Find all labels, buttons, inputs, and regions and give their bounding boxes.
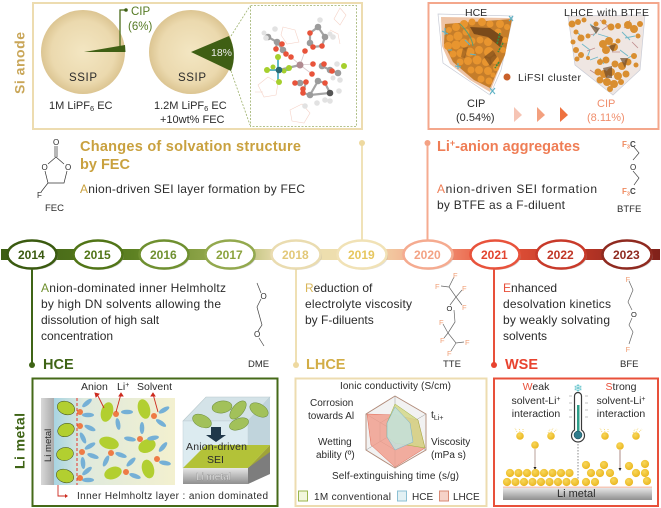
structure: BFE: F (626, 345, 630, 354)
icon: thermometer (569, 392, 588, 442)
year 2023 (602, 240, 653, 270)
heading: Li+-anion aggregates: -anion aggregates (455, 139, 580, 155)
heading: WSE: WSE (505, 357, 538, 373)
diagram: anion-driven SEI cube: Anion-driven (186, 441, 247, 453)
label: strong solvent-Li+ interaction: Strong (606, 381, 637, 393)
year 2018 (272, 240, 322, 270)
section label: Si anode: Si anode (12, 32, 28, 94)
heading: changes of solvation structure (80, 139, 301, 173)
panel: HCE Li metal (32, 378, 278, 506)
structure: TTE: F (447, 349, 452, 358)
diagram: inner Helmholtz layer: Li metal (43, 429, 54, 462)
year 2022: 2022 (547, 248, 574, 262)
label: strong solvent-Li+ interaction: interaction (597, 408, 645, 420)
molecule inset (250, 6, 356, 126)
pie chart: 1M LiPF6 EC: SSIP (69, 72, 97, 84)
heading: HCE: HCE (43, 357, 74, 373)
text: WSE description: Enhanced (503, 281, 557, 295)
year 2019 (338, 240, 388, 270)
structure: DME: O (260, 292, 267, 301)
panel: Si anode solvation (33, 3, 362, 129)
radar axis labels: Corrosion (310, 398, 353, 409)
radar axis labels: Li+ (434, 415, 443, 422)
structure: TTE: F (465, 338, 470, 347)
year 2017 (206, 240, 256, 270)
radar axis labels: Self-extinguishing time (s/g) (332, 471, 459, 482)
text: HCE description: dissolution of high salt (41, 313, 160, 327)
radar axis labels: Ionic conductivity (S/cm) (340, 381, 451, 392)
structure: BFE: O (631, 310, 637, 319)
structure: BFE: F (626, 275, 630, 284)
radar axis labels: ability (º) (316, 450, 355, 461)
pie chart: 1.2M LiPF6 EC + FEC: 6 (204, 104, 208, 113)
pie chart: 1M LiPF6 EC: 6 (90, 104, 94, 113)
radar legend: HCE (412, 492, 433, 503)
label: weak solvent-Li+ interaction: Weak (523, 381, 550, 393)
radar axis labels: towards Al (308, 411, 354, 422)
pie chart: 1.2M LiPF6 EC + FEC: 1.2M LiPF (154, 100, 204, 112)
year 2015: 2015 (84, 248, 111, 262)
Li metal bar: Li metal (557, 488, 596, 500)
structure: FEC (37, 138, 71, 214)
radar axis labels: (mPa s) (431, 450, 466, 461)
Li metal bar (503, 486, 652, 500)
callout: inner Helmholtz layer: Inner Helmholtz layer : anion dominated (77, 491, 268, 502)
structure: BTFE: BTFE (617, 204, 641, 215)
label: CIP 0.54%: (0.54%) (456, 112, 495, 124)
radar legend: 1M conventional (314, 492, 391, 503)
radar legend: LHCE (453, 492, 480, 503)
text: FEC anion-driven SEI: Anion-driven SEI layer formation by FEC (80, 182, 305, 196)
text: WSE description: by weakly solvating (503, 313, 610, 327)
diagram: anion-driven SEI cube: SEI (207, 454, 224, 466)
text: HCE description: Anion-dominated inner Helmholtz (41, 281, 226, 295)
label: weak solvent-Li+ interaction: interaction (512, 408, 560, 420)
label: CIP 8.11%: CIP (597, 98, 615, 110)
pie chart: 1M LiPF6 EC: CIP (131, 6, 150, 18)
structure: BFE (620, 275, 638, 370)
text: LHCE description: by F-diluents (305, 313, 374, 327)
label: strong solvent-Li+ interaction: + (641, 396, 646, 403)
heading: Li+-anion aggregates: + (450, 138, 455, 148)
icon: snowflake: ❄ (573, 382, 583, 395)
year 2014 (8, 240, 58, 270)
labels: anion, Li+, solvent: Anion (81, 381, 108, 393)
pie chart: 1.2M LiPF6 EC + FEC: EC (208, 100, 227, 112)
arrows (514, 107, 568, 122)
structure: TTE: O (446, 304, 452, 313)
structure: DME: DME (248, 359, 269, 370)
text: HCE description: by high DN solvents allowing the (41, 297, 221, 311)
labels: anion, Li+, solvent: Solvent (137, 381, 172, 393)
label: weak solvent-Li+ interaction: + (556, 396, 561, 403)
structure: FEC: O (65, 163, 71, 172)
year 2014: 2014 (18, 248, 45, 262)
pie chart: 1M LiPF6 EC: 1M LiPF (49, 100, 90, 112)
text: BTFE anion-driven SEI (437, 182, 597, 212)
section label: Li metal: Li metal (12, 413, 28, 469)
year 2022 (536, 240, 587, 270)
year 2019: 2019 (348, 248, 375, 262)
radar legend (298, 491, 480, 503)
heading: LHCE: LHCE (306, 357, 346, 373)
structure: DME (248, 283, 269, 370)
structure: FEC: O (53, 138, 59, 147)
structure: FEC: FEC (45, 203, 64, 214)
label: CIP 0.54%: CIP (467, 98, 485, 110)
diagram: anion-driven SEI cube: Li metal (196, 472, 231, 483)
text: HCE description: concentration (41, 329, 113, 343)
radar axis labels: t (431, 409, 434, 421)
pie chart: 1M LiPF6 EC: (6%) (128, 21, 152, 33)
label: CIP 8.11%: (8.11%) (587, 112, 625, 124)
connector lines (29, 140, 497, 368)
year 2015 (74, 240, 124, 270)
structure: TTE: F (439, 318, 444, 327)
text: LHCE description (305, 281, 412, 327)
year 2021: 2021 (481, 248, 508, 262)
heading: changes of solvation structure: by FEC (80, 157, 130, 173)
simulation box: HCE: HCE (465, 7, 487, 19)
label: CIP 8.11% (587, 98, 625, 124)
radar axis labels: Wetting (318, 437, 352, 448)
year 2016: 2016 (150, 248, 177, 262)
structure: BTFE: F (622, 187, 627, 196)
structure: BTFE: 3 (627, 192, 630, 198)
heading: Li+-anion aggregates: Li (437, 139, 450, 155)
pie chart: 1M LiPF6 EC: EC (94, 100, 113, 112)
panel: LHCE radar chart (296, 378, 486, 506)
diagram: anion-driven SEI cube (183, 397, 271, 484)
pie chart: 1.2M LiPF6 EC + FEC: SSIP (178, 72, 206, 84)
deposited Li: strong (582, 460, 651, 486)
structure: BTFE: C (630, 140, 636, 149)
radar chart (366, 396, 426, 468)
structure: TTE: TTE (443, 359, 461, 370)
deposited Li: weak (503, 469, 579, 486)
year 2016 (140, 240, 190, 270)
labels: anion, Li+, solvent: + (125, 382, 129, 389)
structure: TTE: F (440, 336, 445, 345)
structure: FEC: O (42, 163, 48, 172)
text: WSE description (503, 281, 611, 343)
structure: BTFE: 3 (627, 144, 630, 150)
label: weak solvent-Li+ interaction: solvent-Li (511, 395, 556, 407)
label: weak solvent-Li+ interaction (511, 381, 561, 420)
labels: anion, Li+, solvent: Li (117, 381, 125, 393)
structure: BFE: BFE (620, 359, 638, 370)
text: BTFE anion-driven SEI: Anion-driven SEI formation (437, 182, 597, 196)
panel: WSE comparison (494, 378, 658, 506)
year 2018: 2018 (282, 248, 309, 262)
year 2020: 2020 (414, 248, 441, 262)
diagram: inner Helmholtz layer (41, 393, 175, 485)
structure: TTE: F (462, 284, 467, 293)
pie chart: 1.2M LiPF6 EC + FEC: +10wt% FEC (160, 114, 225, 126)
text: HCE description (41, 281, 226, 343)
text: WSE description: solvents (503, 329, 547, 343)
radar axis labels (308, 381, 470, 482)
structure: FEC: F (37, 191, 42, 200)
structure: BTFE: C (630, 187, 636, 196)
pie chart: 1.2M LiPF6 EC + FEC (149, 10, 234, 126)
year 2017: 2017 (216, 248, 243, 262)
year 2021 (470, 240, 521, 270)
pie chart: 1.2M LiPF6 EC + FEC: 18% (211, 47, 232, 59)
text: LHCE description: electrolyte viscosity (305, 297, 412, 311)
structure: DME: O (254, 330, 260, 339)
structure: BTFE (617, 140, 641, 215)
structure: BTFE: O (630, 163, 636, 172)
year 2020 (404, 240, 454, 270)
structure: TTE: F (435, 282, 440, 291)
structure: TTE: F (462, 303, 467, 312)
simulation box: LHCE with BTFE: LHCE with BTFE (564, 7, 649, 19)
radar axis labels: Viscosity (431, 437, 470, 448)
heading: changes of solvation structure: Changes of solvation structure (80, 139, 301, 155)
falling Li ions (515, 428, 642, 471)
label: strong solvent-Li+ interaction (596, 381, 646, 420)
label: strong solvent-Li+ interaction: solvent-Li (596, 395, 641, 407)
structure: BTFE: F (622, 140, 627, 149)
callout: inner Helmholtz layer (58, 485, 268, 502)
structure: TTE: F (453, 271, 458, 280)
simulation box: HCE (438, 7, 513, 95)
timeline (1, 240, 660, 270)
text: WSE description: desolvation kinetics (503, 297, 611, 311)
labels: anion, Li+, solvent (81, 381, 172, 393)
panel: LiFSI cluster simulation (428, 3, 658, 129)
legend: LiFSI cluster: LiFSI cluster (518, 72, 582, 84)
simulation box: LHCE with BTFE (564, 7, 649, 95)
text: BTFE anion-driven SEI: by BTFE as a F-diluent (437, 198, 566, 212)
structure: TTE (435, 271, 470, 370)
text: LHCE description: Reduction of (305, 281, 373, 295)
year 2023: 2023 (613, 248, 640, 262)
pie chart: 1M LiPF6 EC (41, 6, 152, 113)
label: CIP 0.54% (456, 98, 495, 124)
